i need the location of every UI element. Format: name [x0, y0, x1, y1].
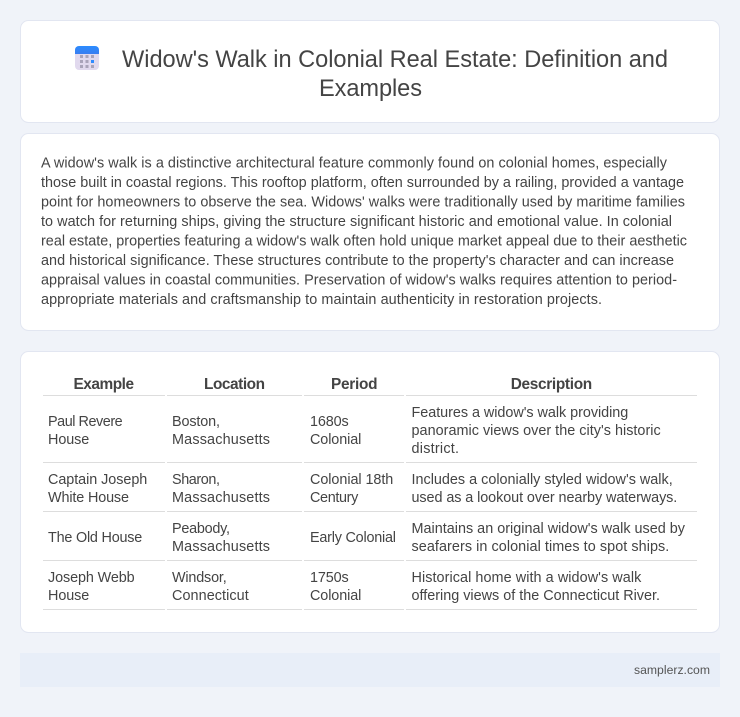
row: Paul Revere House: Boston, — [172, 414, 220, 430]
icon: calendar — [75, 46, 99, 70]
row: Captain Joseph White House: Includes a colonially styled widow's walk, — [412, 472, 673, 488]
row: Joseph Webb House: Colonial — [310, 588, 361, 604]
row: Captain Joseph White House: Colonial 18th — [310, 472, 393, 488]
table header: Location — [204, 376, 265, 393]
description text — [41, 156, 687, 308]
table header — [74, 376, 592, 393]
row: Captain Joseph White House: used as a lookout over nearby waterways. — [412, 490, 677, 506]
row: Paul Revere House: House — [48, 432, 89, 448]
row: The Old House: Early Colonial — [310, 530, 396, 546]
row: Paul Revere House: 1680s — [310, 414, 349, 430]
panel: title card — [20, 20, 720, 122]
row: Joseph Webb House — [48, 570, 660, 604]
description text: A widow's walk is a distinctive architectural feature commonly found on colonial homes, especially — [41, 156, 668, 172]
panel: examples table — [20, 352, 720, 632]
description text: real estate, properties featuring a widow's walk often hold unique market appeal due to their aesthetic — [41, 234, 687, 250]
row: The Old House: seafarers in colonial times to spot ships. — [412, 539, 669, 555]
row: The Old House: Massachusetts — [172, 539, 270, 555]
row: The Old House: Peabody, — [172, 521, 230, 537]
row: Joseph Webb House: 1750s — [310, 570, 349, 586]
row: The Old House: The Old House — [48, 530, 142, 546]
row: Paul Revere House: Features a widow's walk providing — [412, 405, 628, 421]
row: Paul Revere House: Colonial — [310, 432, 361, 448]
row: Paul Revere House: panoramic views over the city's historic — [412, 423, 661, 439]
row: Paul Revere House — [48, 405, 661, 457]
row: The Old House: Maintains an original widow's walk used by — [412, 521, 686, 537]
row: Captain Joseph White House: Century — [310, 490, 359, 506]
row: Joseph Webb House: Joseph Webb — [48, 570, 135, 586]
description text: point for homeowners to observe the sea. Widows' walks were traditionally used by maritime families — [41, 194, 685, 210]
footer: samplerz.com — [634, 663, 710, 677]
row: Captain Joseph White House: Captain Joseph — [48, 472, 147, 488]
row: Joseph Webb House: Historical home with a widow's walk — [412, 570, 642, 586]
row: Captain Joseph White House: Massachusetts — [172, 490, 270, 506]
row: The Old House — [48, 521, 686, 555]
title: Widow's Walk in Colonial Real Estate: Definition and — [122, 47, 668, 73]
row: Joseph Webb House: Windsor, — [172, 570, 227, 586]
table header: Description — [511, 376, 592, 393]
row: Captain Joseph White House: Sharon, — [172, 472, 220, 488]
row: Captain Joseph White House: White House — [48, 490, 129, 506]
row: Paul Revere House: district. — [412, 441, 459, 457]
description text: appraisal values in coastal communities. Preservation of widow's walks requires attention to period- — [41, 272, 677, 288]
footer — [20, 653, 720, 687]
table header: Example — [74, 376, 134, 393]
table header: Period — [331, 376, 378, 393]
title — [122, 47, 668, 102]
row: Joseph Webb House: Connecticut — [172, 588, 249, 604]
row: Joseph Webb House: offering views of the Connecticut River. — [412, 588, 660, 604]
description text: appropriate materials and craftsmanship to maintain authenticity in restoration projects. — [41, 292, 602, 308]
row: Joseph Webb House: House — [48, 588, 89, 604]
title: Examples — [319, 76, 422, 102]
description text: to watch for returning ships, giving the structure significant historic and emotional value. In colonial — [41, 214, 672, 230]
row: Captain Joseph White House — [48, 472, 677, 506]
panel: description — [20, 134, 720, 330]
row: Paul Revere House: Paul Revere — [48, 414, 123, 430]
row: Paul Revere House: Massachusetts — [172, 432, 270, 448]
description text: those built in coastal regions. This rooftop platform, often surrounded by a railing, provided a vantage — [41, 175, 684, 191]
description text: and historical significance. These structures contribute to the property's character and can increase — [41, 253, 674, 269]
table rules — [43, 395, 697, 610]
